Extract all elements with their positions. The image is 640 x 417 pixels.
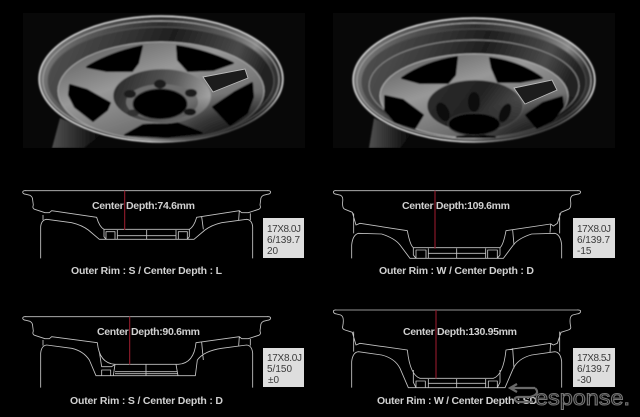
label: center depth: Center Depth:74.6mm [92, 200, 195, 212]
diagram: Outer Rim S / Center Depth L [23, 191, 304, 277]
spec box: -15 [577, 246, 592, 257]
spec box [263, 218, 304, 258]
diagram: Outer Rim W / Center Depth D [333, 191, 615, 277]
watermark: response logo: esponse. [535, 387, 630, 410]
spec box: 6/139.7 [267, 235, 300, 246]
watermark: response logo [510, 384, 630, 410]
caption: Outer Rim : S / Center Depth : L [71, 265, 223, 277]
spec box [573, 218, 615, 258]
spec box: 6/139.7 [577, 235, 610, 246]
spec box: ±0 [268, 375, 279, 386]
panel: wheel photo, shallow center [36, 14, 286, 148]
spec box: 5/150 [267, 364, 292, 375]
icon: spoke badge [514, 80, 557, 104]
spec box: 17X8.0J [267, 224, 301, 235]
label: center depth: Center Depth:90.6mm [97, 326, 200, 338]
caption: Outer Rim : S / Center Depth : D [70, 395, 223, 407]
spec box [263, 348, 304, 387]
diagram: Outer Rim W / Center Depth SD [333, 310, 615, 407]
spec box [573, 348, 615, 387]
panel: wheel photo, deep center [350, 16, 598, 148]
label: center depth: Center Depth:109.6mm [402, 200, 510, 212]
label: center depth: Center Depth:130.95mm [403, 326, 517, 338]
spec box: 6/139.7 [577, 364, 610, 375]
diagram: Outer Rim S / Center Depth D [23, 317, 304, 407]
spec box: -30 [577, 375, 592, 386]
icon: spoke badge [203, 69, 248, 92]
spec box: 20 [267, 246, 279, 257]
spec box: 17X8.5J [577, 353, 611, 364]
caption: Outer Rim : W / Center Depth : SD [377, 395, 537, 407]
caption: Outer Rim : W / Center Depth : D [379, 265, 534, 277]
spec box: 17X8.0J [577, 224, 611, 235]
spec box: 17X8.0J [267, 353, 302, 364]
